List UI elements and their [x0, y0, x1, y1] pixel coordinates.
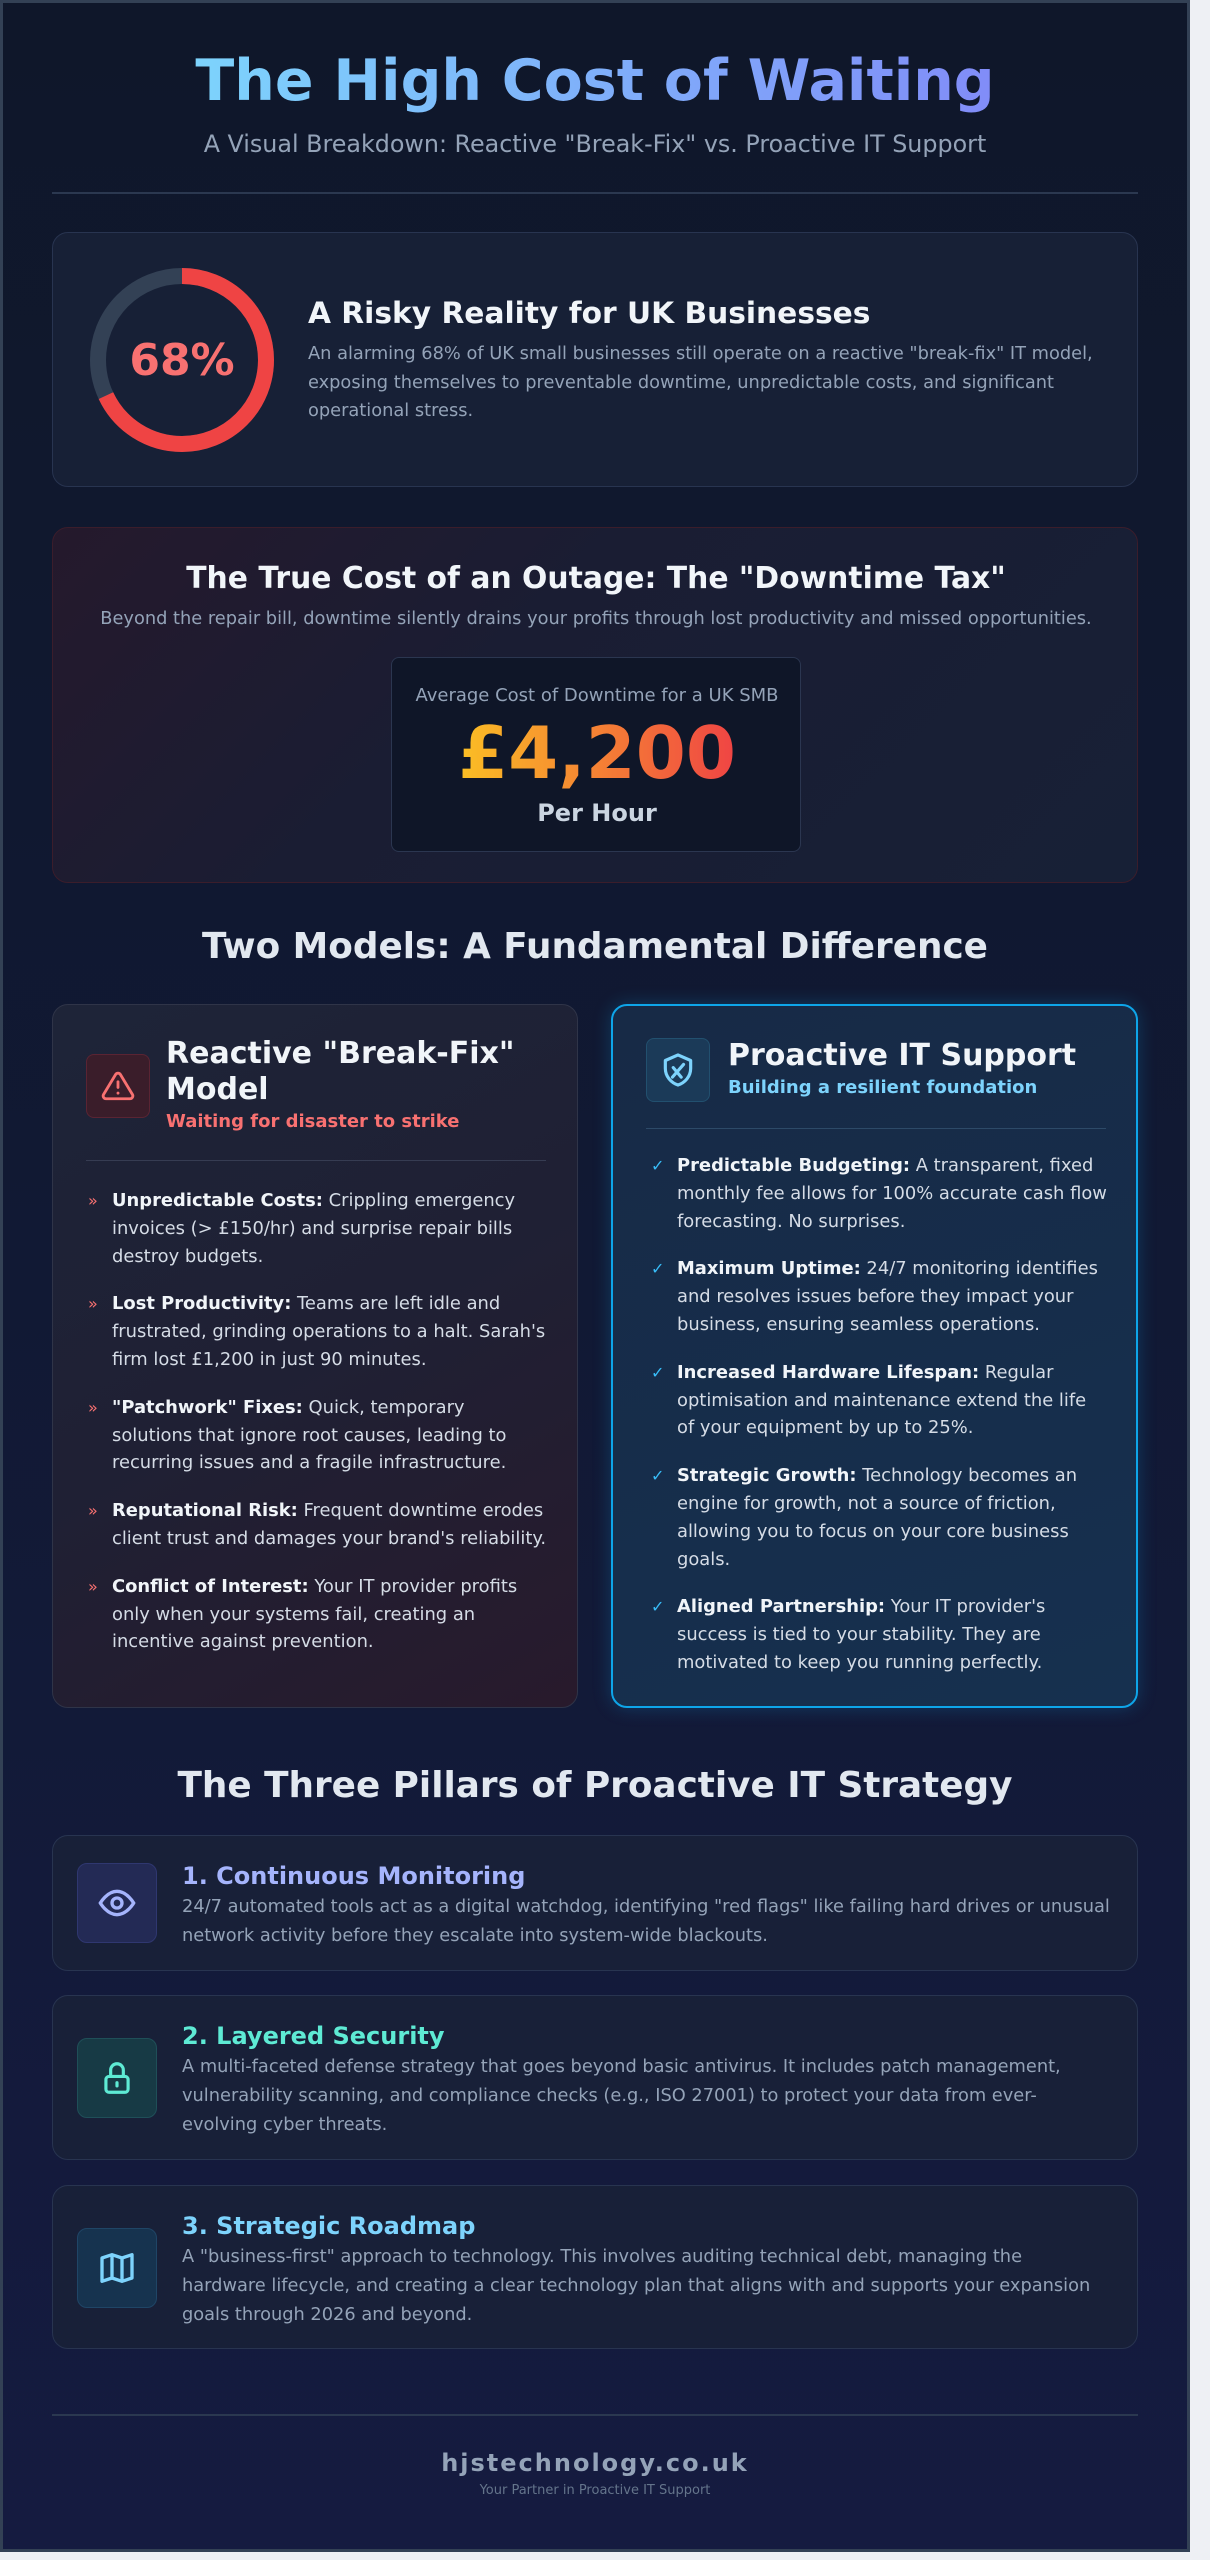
- text block: evolving cyber threats.: [182, 2114, 387, 2135]
- panel: pillar 3 roadmap: [52, 2185, 1138, 2349]
- heading: The True Cost of an Outage: The "Downtime Tax": [186, 561, 1006, 596]
- icon: lock: [77, 2038, 157, 2118]
- list: proactive benefits: Maximum Uptime: 24/7 monitoring identifies and resolves issues before they impact your business, ensuring seamless operations.: [677, 1258, 1098, 1335]
- panel: proactive model: [611, 1004, 1138, 1708]
- text block: 24/7 automated tools act as a digital watchdog, identifying "red flags" like failing hard drives or unusual network activity before they escalate into system-wide blackouts.: [182, 1896, 1110, 1946]
- panel: reactive model: »: [88, 1501, 98, 1520]
- icon: eye: [77, 1863, 157, 1943]
- footer: Your Partner in Proactive IT Support: [480, 2483, 710, 2498]
- icon: map: [77, 2228, 157, 2308]
- text block: [182, 2246, 1090, 2325]
- list: reactive drawbacks: Reputational Risk: Frequent downtime erodes client trust and damages your brand's reliability.: [112, 1500, 546, 1549]
- subtitle: A Visual Breakdown: Reactive "Break-Fix" vs. Proactive IT Support: [204, 130, 986, 158]
- heading: A Risky Reality for UK Businesses: [308, 296, 870, 331]
- panel: downtime tax: [52, 527, 1138, 883]
- list: reactive drawbacks: Lost Productivity: Teams are left idle and frustrated, grinding operations to a halt. Sarah's firm lost £1,200 in just 90 minutes.: [112, 1293, 545, 1370]
- panel: reactive model: »: [88, 1191, 98, 1210]
- panel: proactive model: ✓: [651, 1466, 664, 1485]
- heading: 1. Continuous Monitoring: [182, 1862, 525, 1890]
- panel: proactive model: ✓: [651, 1156, 664, 1175]
- heading: 3. Strategic Roadmap: [182, 2212, 475, 2240]
- panel: reactive model: »: [88, 1294, 98, 1313]
- subheading: Building a resilient foundation: [728, 1077, 1037, 1098]
- panel: pillar 1 monitoring: [52, 1835, 1138, 1971]
- footer: hjstechnology.co.uk: [441, 2449, 749, 2477]
- heading: two models: Two Models: A Fundamental Difference: [202, 926, 988, 967]
- icon: warning: [86, 1054, 150, 1118]
- footer: [441, 2449, 749, 2498]
- subheading: Waiting for disaster to strike: [166, 1111, 460, 1132]
- chart: 68% ring: [90, 268, 274, 452]
- heading: three pillars: The Three Pillars of Proactive IT Strategy: [177, 1765, 1013, 1806]
- chart: 68% ring: 68%: [129, 335, 235, 386]
- list: proactive benefits: Increased Hardware Lifespan: Regular optimisation and maintenance extend the life of your equipment by up to 25%.: [677, 1362, 1086, 1438]
- callout: cost per hour: Average Cost of Downtime for a UK SMB: [415, 685, 779, 706]
- panel: proactive model: ✓: [651, 1363, 664, 1382]
- heading: 2. Layered Security: [182, 2022, 445, 2050]
- text block: hardware lifecycle, and creating a clear technology plan that aligns with and supports your expansion goals through 2026 and beyond.: [182, 2275, 1090, 2325]
- list: reactive drawbacks: [88, 1190, 546, 1652]
- text block: [182, 2056, 1061, 2135]
- title: The High Cost of Waiting: [195, 48, 995, 114]
- list: reactive drawbacks: "Patchwork" Fixes: Quick, temporary solutions that ignore root causes, leading to recurring issues and a fragile infrastructure.: [112, 1397, 506, 1473]
- callout: cost per hour: Per Hour: [537, 799, 657, 827]
- panel: risky reality: [52, 232, 1138, 487]
- list: proactive benefits: [651, 1155, 1107, 1673]
- heading: Reactive "Break-Fix" Model: [166, 1036, 514, 1107]
- callout: cost per hour: £4,200: [458, 711, 736, 795]
- icon: shield: [646, 1038, 710, 1102]
- panel: pillar 2 security: [52, 1995, 1138, 2160]
- list: reactive drawbacks: Unpredictable Costs: Crippling emergency invoices (> £150/hr) and surprise repair bills destroy budgets.: [112, 1190, 515, 1267]
- panel: proactive model: ✓: [651, 1597, 664, 1616]
- list: proactive benefits: Aligned Partnership: Your IT provider's success is tied to your stability. They are motivated to keep you running perfectly.: [677, 1596, 1045, 1673]
- panel: reactive model: »: [88, 1398, 98, 1417]
- list: reactive drawbacks: Conflict of Interest: Your IT provider profits only when your systems fail, creating an incentive against prevention.: [112, 1576, 517, 1652]
- text block: An alarming 68% of UK small businesses still operate on a reactive "break-fix" IT model, exposing themselves to preventable downtime, unpredictable costs, and significant operational stress.: [308, 343, 1093, 421]
- list: proactive benefits: Predictable Budgeting: A transparent, fixed monthly fee allows for 100% accurate cash flow forecasting. No surprises.: [677, 1155, 1107, 1232]
- heading: Proactive IT Support: [728, 1038, 1076, 1073]
- panel: reactive model: »: [88, 1577, 98, 1596]
- text block: A "business-first" approach to technology. This involves auditing technical debt, managing the: [182, 2246, 1022, 2267]
- panel: reactive model: [52, 1004, 578, 1708]
- panel: proactive model: ✓: [651, 1259, 664, 1278]
- callout: cost per hour: [391, 657, 801, 852]
- text block: Beyond the repair bill, downtime silently drains your profits through lost productivity and missed opportunities.: [100, 608, 1092, 629]
- text block: A multi-faceted defense strategy that goes beyond basic antivirus. It includes patch management, vulnerability scanning, and compliance checks (e.g., ISO 27001) to protect your data from ever-: [182, 2056, 1061, 2106]
- list: proactive benefits: Strategic Growth: Technology becomes an engine for growth, not a source of friction, allowing you to focus on your core business goals.: [677, 1465, 1077, 1570]
